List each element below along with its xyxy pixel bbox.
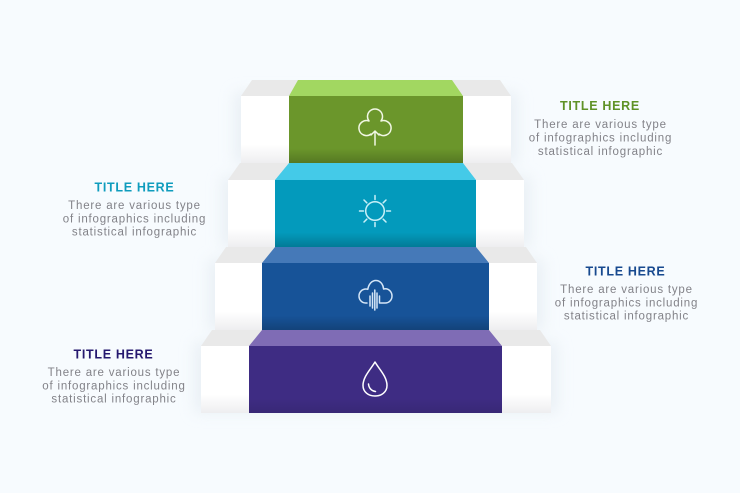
text block: top right: of infographics including [529, 132, 672, 144]
staircase [194, 80, 558, 413]
step 3: blue [215, 247, 537, 330]
text block: bottom left: statistical infographic [51, 394, 177, 406]
icon: tree [359, 109, 391, 145]
text block: top right: TITLE HERE [560, 99, 640, 113]
text block: upper left: of infographics including [63, 214, 206, 226]
text block: bottom left: There are various type [48, 367, 180, 379]
text block: upper left: TITLE HERE [95, 180, 174, 194]
text block: bottom left: TITLE HERE [74, 348, 153, 362]
step 4: purple [201, 330, 551, 413]
text block: upper left [63, 180, 206, 238]
text block: upper left: statistical infographic [72, 226, 197, 238]
text block: lower right: There are various type [560, 284, 693, 296]
text block: lower right: statistical infographic [564, 310, 689, 322]
text block: top right: There are various type [534, 119, 667, 131]
icon: sun [360, 196, 390, 226]
text block: lower right: TITLE HERE [586, 264, 665, 278]
icon: rain cloud [359, 280, 392, 310]
step 1: green [241, 80, 511, 163]
text block: lower right [555, 264, 698, 322]
text block: top right [529, 99, 672, 158]
step 2: cyan [228, 163, 524, 247]
text block: bottom left [42, 348, 186, 406]
text block: upper left: There are various type [68, 200, 201, 212]
soft shadow behind stairs [194, 92, 558, 413]
text block: top right: statistical infographic [538, 146, 663, 158]
text block: lower right: of infographics including [555, 298, 698, 310]
text block: bottom left: of infographics including [42, 380, 186, 392]
icon: water drop [363, 362, 387, 396]
